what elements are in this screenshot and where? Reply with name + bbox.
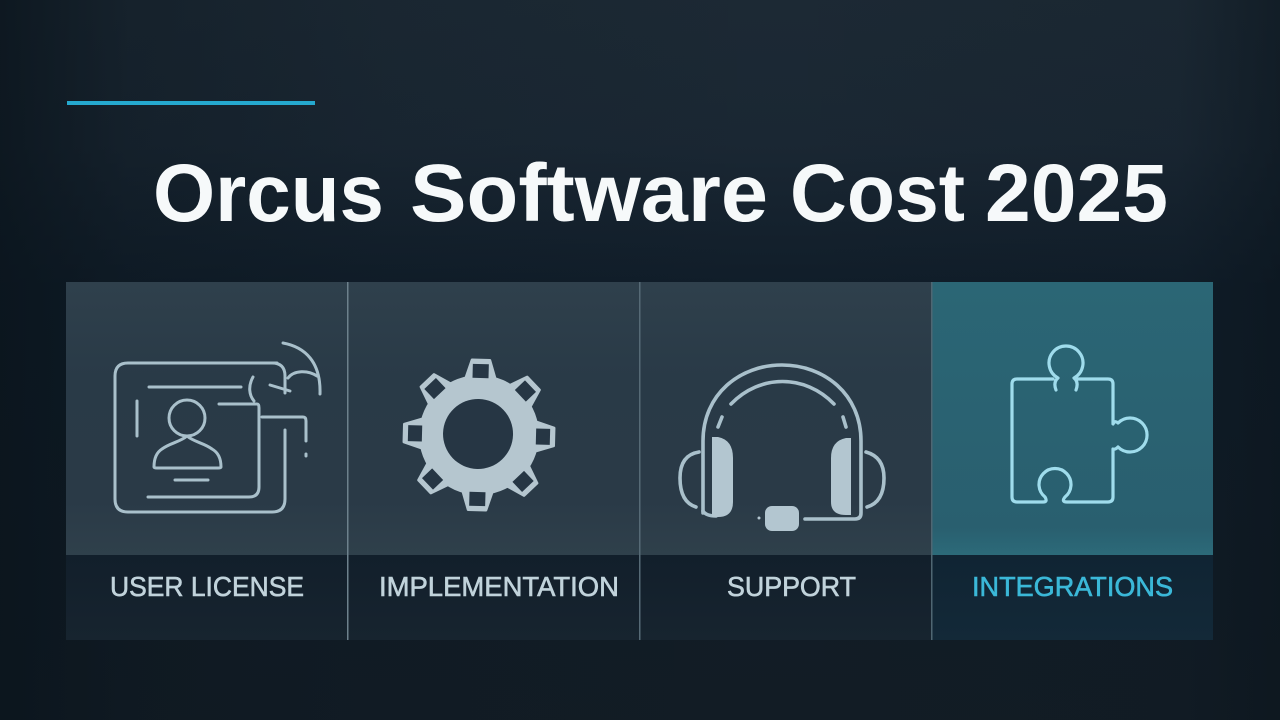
title: 2025	[985, 148, 1168, 239]
panel: implementation	[347, 282, 639, 640]
panel: user license	[66, 282, 347, 640]
label: support: SUPPORT	[727, 571, 856, 602]
icon: puzzle piece	[1012, 346, 1147, 502]
panel: support	[639, 282, 931, 640]
panel dividers	[347, 282, 932, 640]
label: integrations: INTEGRATIONS	[972, 571, 1173, 602]
icon: gear	[402, 358, 556, 512]
label: user license: USER LICENSE	[110, 571, 304, 602]
panel: integrations	[931, 282, 1213, 640]
title: Software	[410, 148, 768, 239]
icon: headset	[680, 365, 884, 531]
accent line	[67, 101, 315, 105]
title: Orcus	[153, 148, 384, 239]
title: Cost	[790, 148, 965, 239]
label: implementation: IMPLEMENTATION	[379, 571, 619, 602]
icon: user license card	[115, 343, 320, 512]
